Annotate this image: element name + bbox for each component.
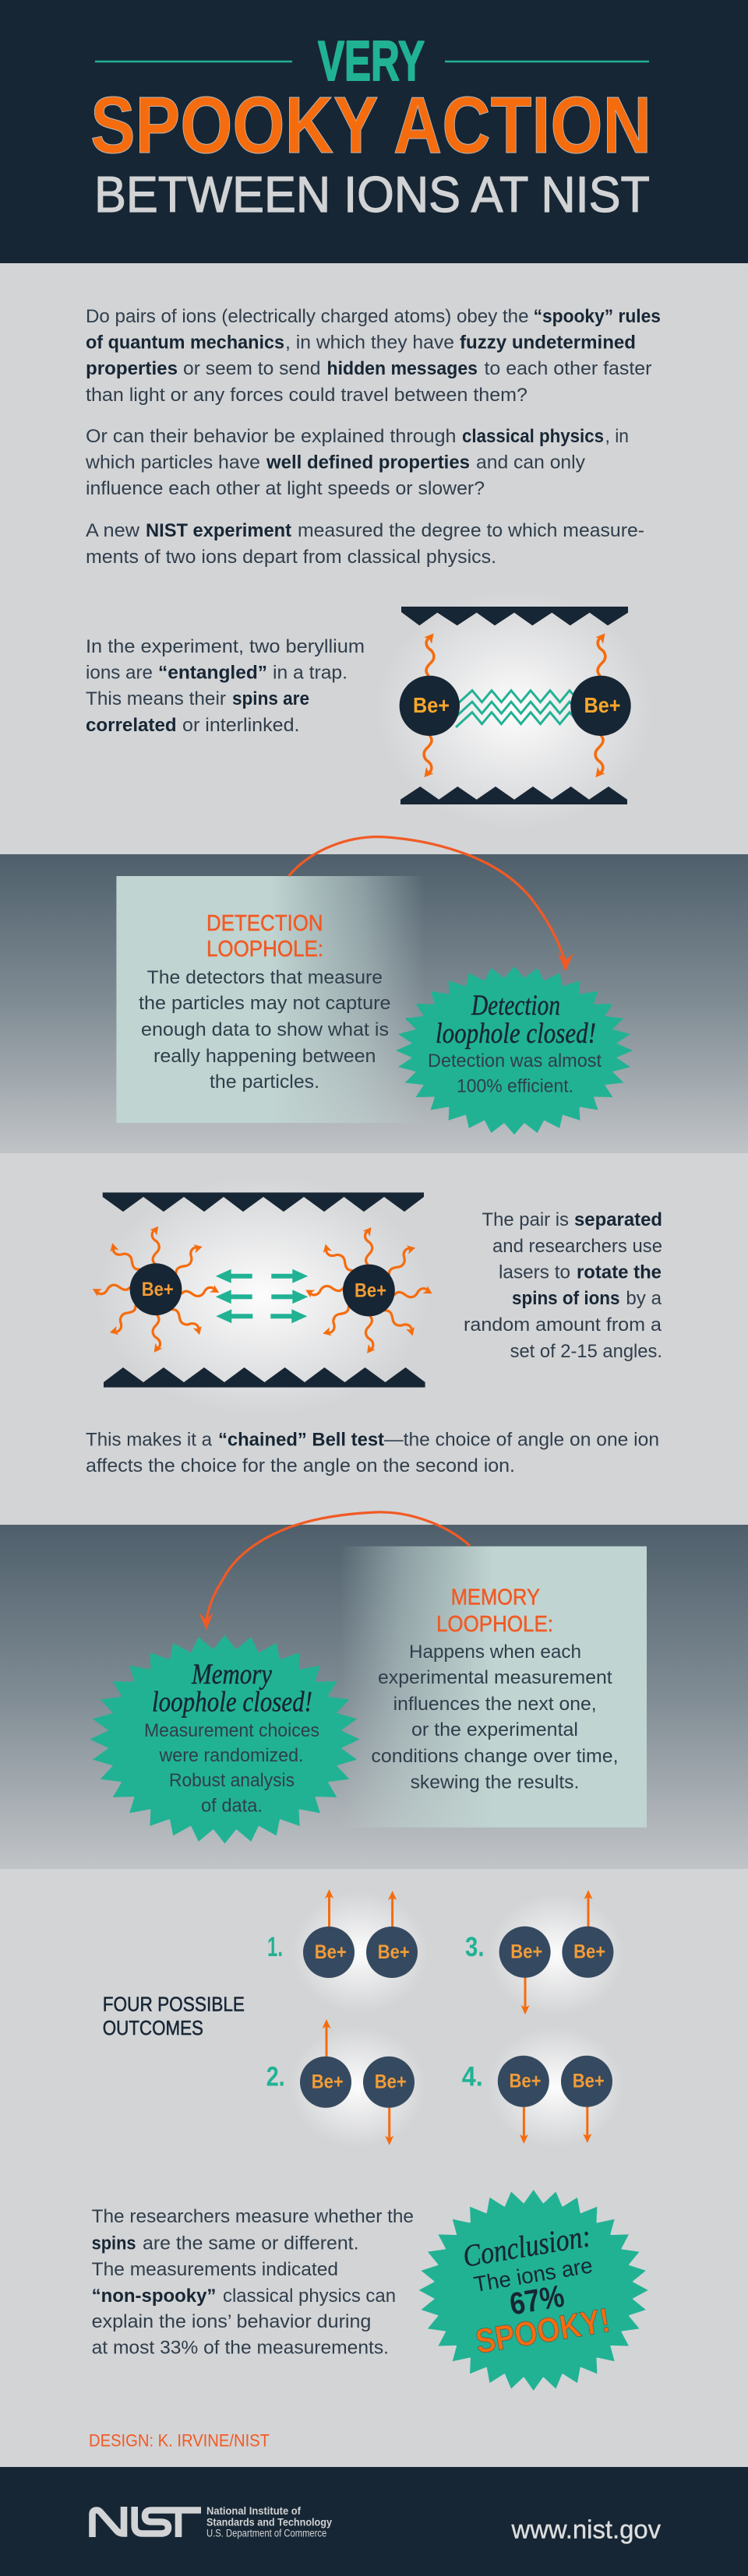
panel: title header	[0, 0, 748, 263]
text block: classical question: and can only	[476, 452, 585, 473]
text block: classical question: well defined properties	[266, 452, 470, 473]
ion with laser rays: left	[93, 1226, 219, 1353]
text block: new NIST experiment	[86, 520, 644, 568]
diagram: separated ions with lasers	[93, 1175, 432, 1416]
starburst: memory loophole closed: Robust analysis	[169, 1770, 295, 1791]
text block: entangled ions: spins are	[232, 688, 309, 709]
text: detection description: enough data to show what is	[141, 1019, 389, 1040]
outcome 1: both up: 1.	[267, 1932, 283, 1962]
text block: separated and rotated spins: spins of ions	[512, 1288, 620, 1309]
logo: NIST	[92, 2505, 332, 2539]
text block: classical question: , in	[605, 426, 629, 447]
text block: spooky question: or seem to send	[183, 358, 321, 379]
text block: separated and rotated spins: set of 2-15 angles.	[510, 1341, 662, 1362]
trap: top electrode	[401, 607, 628, 625]
text block: classical question: which particles have	[85, 452, 260, 473]
text block: separated and rotated spins: The pair is	[482, 1209, 569, 1230]
text block: measurement results: The researchers measure whether the	[92, 2206, 414, 2227]
text block: separated and rotated spins: and researchers use	[492, 1236, 662, 1257]
text: detection description	[139, 967, 390, 1093]
text: detection description: really happening between	[153, 1046, 376, 1067]
outcome 1: both up: Be+	[378, 1941, 410, 1963]
trap: bottom electrode	[400, 787, 627, 804]
text block: chained Bell test: affects the choice for the angle on the second ion.	[86, 1455, 515, 1476]
text block: measurement results: “non-spooky”	[92, 2286, 216, 2307]
text block: spooky question: fuzzy undetermined	[460, 332, 636, 354]
text: detection description: The detectors that measure	[147, 967, 383, 988]
text block: entangled ions: correlated	[86, 715, 177, 736]
text block: classical question: Or can their behavior be explained through	[86, 426, 457, 447]
text block: spooky question: of quantum mechanics	[86, 332, 284, 354]
text block: classical question: classical physics	[462, 426, 604, 447]
starburst: memory loophole closed	[90, 1635, 360, 1844]
ion: right	[570, 676, 631, 736]
callout box: memory loophole	[340, 1547, 647, 1828]
text: memory description: influences the next one,	[393, 1694, 597, 1715]
heading: spooky action: SPOOKY ACTION	[90, 80, 651, 170]
text block: separated and rotated spins	[464, 1209, 662, 1362]
text block: entangled ions: In the experiment, two beryllium	[86, 636, 365, 657]
heading: memory loophole: LOOPHOLE:	[436, 1612, 553, 1637]
starburst: detection loophole closed: Detection	[471, 990, 560, 1022]
logo: NIST: U.S. Department of Commerce	[206, 2527, 326, 2539]
heading: four possible outcomes: OUTCOMES	[103, 2016, 203, 2039]
heading: four possible outcomes: FOUR POSSIBLE	[103, 1993, 245, 2016]
text block: measurement results: explain the ions’ behavior during	[92, 2311, 371, 2332]
text block: spooky question: “spooky” rules	[534, 306, 661, 327]
outcome 4: both down: Be+	[573, 2071, 605, 2092]
starburst: conclusion 67% spooky	[419, 2190, 648, 2391]
text: detection description: the particles may not capture	[139, 993, 390, 1014]
outcome 3: down and up	[465, 1890, 625, 2015]
text: memory description: conditions change over time,	[371, 1746, 619, 1767]
outcome 3: down and up: Be+	[573, 1941, 605, 1963]
arrow: detection loophole to closed	[288, 837, 573, 972]
text block: measurement results: are the same or different.	[143, 2233, 358, 2254]
outcome 3: down and up: Be+	[510, 1941, 542, 1963]
starburst: memory loophole closed: of data.	[201, 1796, 263, 1817]
teal arrows: separating right	[270, 1269, 308, 1323]
text block: entangled ions: or interlinked.	[182, 715, 299, 736]
text block: measurement results	[92, 2206, 414, 2359]
text block: entangled ions: in a trap.	[273, 663, 348, 684]
text block: spooky question: , in which they have	[285, 332, 454, 354]
text block: measurement results: The measurements indicated	[92, 2259, 338, 2280]
heading: memory loophole: MEMORY	[451, 1585, 540, 1610]
outcome 1: both up: Be+	[315, 1941, 347, 1963]
starburst: memory loophole closed: were randomized.	[159, 1745, 304, 1766]
text block: chained Bell test: This makes it a	[86, 1430, 213, 1450]
logo: NIST: National Institute of	[206, 2505, 301, 2517]
panel: detection loophole	[0, 837, 748, 1153]
heading: VERY with side rules: VERY	[318, 30, 425, 93]
text: memory description	[371, 1642, 619, 1793]
text block: spooky question: hidden messages	[327, 358, 478, 379]
text block: new NIST experiment: ments of two ions depart from classical physics.	[86, 547, 496, 568]
text block: entangled ions: This means their	[86, 688, 226, 709]
outcome 4: both down	[462, 2026, 624, 2148]
arrow: memory loophole to closed	[199, 1512, 470, 1630]
text block: entangled ions	[86, 636, 365, 736]
wavy photon arrows	[424, 633, 605, 777]
text block: chained Bell test: —the choice of angle on one ion	[384, 1430, 659, 1450]
starburst: memory loophole closed: loophole closed!	[152, 1687, 312, 1719]
starburst: detection loophole closed: loophole closed!	[436, 1018, 596, 1050]
text block: separated and rotated spins: rotate the	[577, 1262, 662, 1283]
text block: measurement results: spins	[92, 2233, 136, 2254]
logo: NIST: Standards and Technology	[206, 2516, 332, 2528]
starburst: detection loophole closed: Detection was almost	[428, 1050, 602, 1072]
text block: spooky question: properties	[86, 358, 178, 379]
text: memory description: experimental measurement	[378, 1667, 612, 1688]
text block: entangled ions: “entangled”	[158, 663, 267, 684]
panel: memory loophole	[0, 1512, 748, 1869]
text block: chained Bell test: “chained” Bell test	[218, 1430, 384, 1450]
heading: detection loophole	[206, 911, 323, 962]
ion: left	[400, 676, 460, 736]
text block: spooky question: Do pairs of ions (electrically charged atoms) obey the	[86, 306, 528, 327]
ion with laser rays: right	[305, 1227, 432, 1353]
text block: chained Bell test	[86, 1430, 659, 1476]
outcome 2: up and down: 2.	[266, 2062, 285, 2092]
credit: design: DESIGN: K. IRVINE/NIST	[89, 2431, 270, 2451]
starburst: detection loophole closed: 100% efficient.	[457, 1076, 573, 1097]
text block: spooky question: to each other faster	[485, 358, 651, 379]
text block: new NIST experiment: NIST experiment	[146, 520, 291, 541]
text block: separated and rotated spins: lasers to	[499, 1262, 570, 1283]
text block: measurement results: classical physics can	[223, 2286, 396, 2307]
trap: bottom electrode	[104, 1367, 425, 1388]
text block: new NIST experiment: measured the degree to which measure-	[298, 520, 644, 541]
heading: detection loophole: LOOPHOLE:	[206, 937, 323, 962]
text: detection description: the particles.	[210, 1072, 319, 1093]
heading: between ions at NIST: BETWEEN IONS AT NIST	[94, 166, 650, 223]
heading: memory loophole	[436, 1585, 553, 1637]
text block: measurement results: at most 33% of the measurements.	[92, 2338, 389, 2359]
outcome 2: up and down: Be+	[312, 2071, 344, 2093]
starburst: conclusion 67% spooky: The ions are	[472, 2253, 595, 2296]
trap: top electrode	[103, 1192, 424, 1212]
outcome 4: both down: 4.	[462, 2062, 483, 2092]
starburst: conclusion 67% spooky: Conclusion:	[460, 2218, 593, 2274]
outcome 2: up and down: Be+	[375, 2071, 407, 2093]
teal arrows: separating left	[216, 1269, 252, 1323]
ion: right: Be+	[584, 693, 620, 717]
heading: detection loophole: DETECTION	[206, 911, 323, 936]
ion with laser rays: right: Be+	[355, 1279, 386, 1301]
outcome 4: both down: Be+	[510, 2071, 541, 2092]
text block: separated and rotated spins: random amount from a	[464, 1314, 662, 1336]
ion with laser rays: left: Be+	[142, 1279, 174, 1300]
starburst: conclusion 67% spooky: SPOOKY!	[473, 2301, 613, 2361]
text block: classical question	[85, 426, 629, 499]
text block: spooky question: than light or any forces could travel between them?	[86, 385, 527, 406]
entanglement zigzag lines	[456, 691, 577, 727]
heading: four possible outcomes	[103, 1993, 245, 2039]
diagram: entangled ions in trap	[376, 589, 654, 830]
text: memory description: Happens when each	[409, 1642, 581, 1663]
starburst: memory loophole closed: Measurement choices	[144, 1720, 319, 1741]
starburst: memory loophole closed: Memory	[191, 1659, 272, 1691]
callout box: detection loophole	[116, 876, 425, 1123]
text block: entangled ions: ions are	[86, 663, 153, 684]
outcome 3: down and up: 3.	[465, 1932, 485, 1962]
outcome 2: up and down	[266, 2019, 426, 2148]
website url: www.nist.gov	[511, 2514, 661, 2543]
text block: separated and rotated spins: by a	[626, 1288, 662, 1309]
text block: separated and rotated spins: separated	[574, 1209, 662, 1230]
ion: left: Be+	[413, 693, 450, 717]
starburst: detection loophole closed	[396, 966, 633, 1135]
starburst: conclusion 67% spooky: 67%	[507, 2279, 566, 2322]
panel: footer	[0, 2467, 748, 2576]
text: memory description: skewing the results.	[411, 1772, 579, 1793]
text block: spooky question	[86, 306, 661, 406]
text: memory description: or the experimental	[411, 1719, 578, 1740]
text block: classical question: influence each other at light speeds or slower?	[86, 478, 485, 499]
text block: new NIST experiment: A new	[86, 520, 140, 541]
outcome 1: both up	[267, 1889, 429, 2013]
